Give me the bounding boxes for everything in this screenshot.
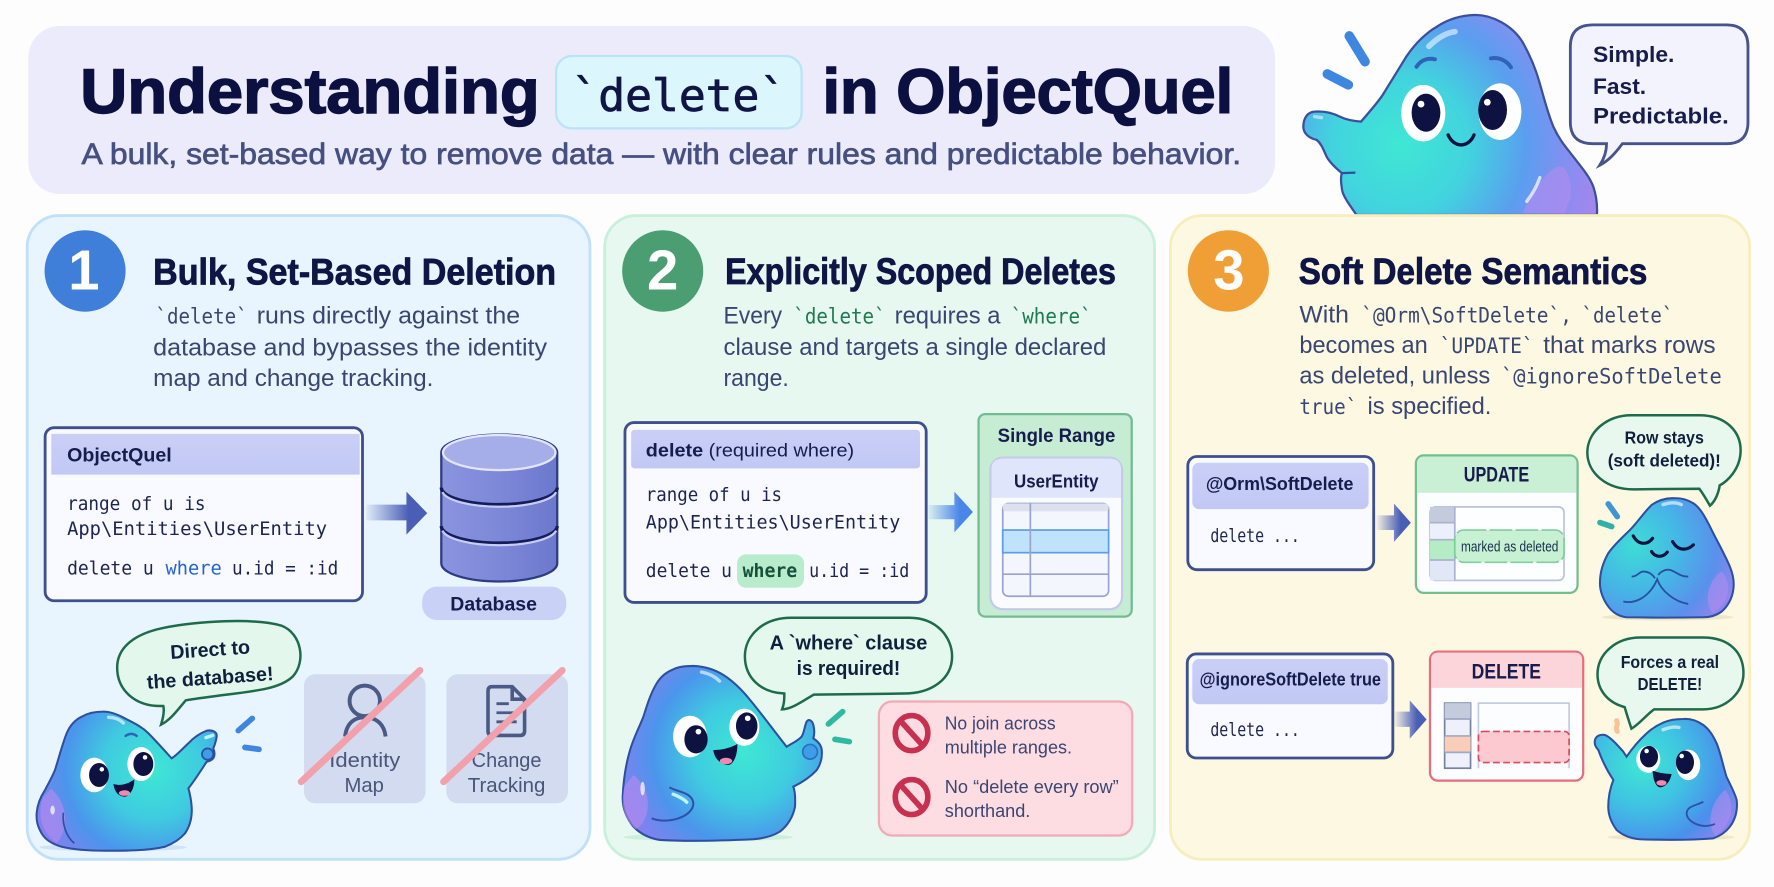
code card: delete required where: App\Entities\UserEntity [646,512,900,533]
speech bubble: simple fast predictable: Fast. [1593,74,1646,99]
update result card [1416,455,1578,593]
speech bubble: forces a real delete: Forces a real [1621,652,1719,672]
speech bubble: row stays [1587,415,1741,506]
heading 1: Bulk, Set-Based Deletion [153,250,556,293]
crossed out: identity map: Identity [329,750,401,772]
code card: Orm SoftDelete: delete ... [1210,526,1300,547]
icon: orange tick [1616,721,1617,731]
panel 3 contents [1187,230,1722,781]
body text 3 [1299,302,1722,420]
delete result card: DELETE [1472,660,1541,683]
title: `delete` [571,70,786,122]
number badge 3: 3 [1213,239,1245,302]
database label: Database [450,593,537,615]
panel 2: explicitly scoped deletes [605,216,1155,859]
header banner [28,26,1275,194]
code card: ObjectQuel: range of u is [67,494,206,515]
single range table card [979,414,1132,617]
code card: ObjectQuel: delete u [67,559,154,580]
speech bubble: where clause required [745,618,952,709]
code card: ObjectQuel: where [166,559,222,580]
body text 1: map and change tracking. [153,366,433,392]
number badge 3 [1188,230,1269,312]
title: in ObjectQuel [823,57,1233,127]
body text 3: is specified. [1367,394,1491,420]
body text 2: range. [723,366,789,392]
body text 2: `delete` [793,305,886,329]
mascot: pointing at database [37,712,217,851]
number badge 1 [45,230,126,312]
code card: delete required where: delete u [646,561,732,582]
body text 3: `@ignoreSoftDelete [1501,364,1722,389]
icon: motion ticks [238,718,259,749]
code card: Orm SoftDelete: @Orm\SoftDelete [1206,473,1353,494]
subtitle: A bulk, set-based way to remove data — with clear rules and predictable behavior. [81,138,1241,171]
code card: Orm SoftDelete [1188,457,1374,570]
icon: prohibited [895,716,928,751]
body text 2: Every [723,304,782,330]
speech bubble: forces a real delete [1598,638,1743,729]
speech bubble: where clause required: A `where` clause [770,632,927,654]
speech bubble: direct to the database [117,621,300,725]
heading 2: Explicitly Scoped Deletes [725,250,1116,292]
body text 2: clause and targets a single declared [723,335,1106,361]
speech bubble: forces a real delete: DELETE! [1638,674,1702,694]
body text 1: runs directly against the [257,304,520,330]
title: Understanding [80,57,540,127]
icon: motion ticks main mascot [1327,36,1365,85]
body text 3: that marks rows [1543,333,1716,359]
icon: motion ticks [828,712,849,742]
speech bubble: simple fast predictable: Predictable. [1593,103,1729,128]
speech bubble: simple fast predictable [1570,25,1748,165]
number badge 2: 2 [647,239,678,302]
code card: ignoreSoftDelete: @ignoreSoftDelete true [1200,670,1381,690]
number badge 1: 1 [68,238,100,302]
body text 3: true` [1299,395,1357,419]
code card: delete required where: where [743,561,797,582]
panel 1 contents [45,230,568,803]
body text 2 [723,304,1106,392]
body text 1: database and bypasses the identity [153,335,547,361]
speech bubble: simple fast predictable: Simple. [1593,42,1674,67]
arrow to database [366,492,427,535]
code card: delete required where: delete (required where) [646,439,854,461]
code card: ignoreSoftDelete: delete ... [1210,720,1300,741]
panel 3: soft delete semantics [1170,216,1750,859]
speech bubble: where clause required: is required! [797,658,900,680]
icon: motion ticks [1600,504,1617,527]
code card: ObjectQuel [45,428,363,601]
mascot: waving [1595,719,1737,841]
body text 3: `UPDATE` [1440,334,1534,358]
speech bubble: row stays: Row stays [1625,427,1704,447]
body text 2: `where` [1011,305,1092,329]
crossed out: change tracking: Tracking [468,775,545,797]
number badge 2 [622,230,703,312]
arrow to update [1376,503,1411,542]
update result card: UPDATE [1464,463,1529,486]
speech bubble: row stays: (soft deleted)! [1608,451,1721,471]
body text 1: `delete` [155,305,248,329]
code card: ObjectQuel: ObjectQuel [67,445,172,467]
rules callout: No “delete every row” [945,776,1119,797]
code card: delete required where [625,423,926,602]
database label [422,587,566,620]
rules callout [879,701,1132,836]
crossed out: identity map: Map [345,775,384,797]
arrow to single range [928,492,973,532]
delete result card [1430,652,1583,781]
single range table card: UserEntity [1014,471,1099,492]
arrow to delete [1395,700,1427,739]
code card: delete required where: range of u is [646,485,782,506]
title [80,56,1233,128]
rules callout: shorthand. [945,800,1030,821]
body text 1 [153,304,547,392]
crossed out: identity map [301,670,426,803]
rules callout: multiple ranges. [945,736,1072,758]
crossed out: change tracking [444,670,568,803]
single range table card: Single Range [998,426,1115,447]
speech bubble: direct to the database: Direct to [170,636,251,664]
crossed out: change tracking: Change [472,750,541,772]
panel 1: bulk set-based deletion [27,216,590,859]
rules callout: No join across [945,713,1056,734]
body text 3: `delete` [1581,303,1673,327]
body text 3: as deleted, unless [1299,363,1490,390]
heading 3: Soft Delete Semantics [1299,250,1647,292]
body text 3: becomes an [1299,333,1428,359]
code card: ignoreSoftDelete [1187,654,1393,758]
code card: delete required where: u.id = :id [809,561,909,582]
body text 2: requires a [895,304,1001,330]
mascot: finger raised [623,666,822,841]
panel 2 contents [622,230,1132,836]
icon: database [441,434,557,582]
mascot: main, waving top right [1303,15,1597,215]
code card: ObjectQuel: App\Entities\UserEntity [67,519,327,540]
body text 3: With [1299,302,1349,328]
mascot: content eyes closed [1600,498,1734,621]
code card: ObjectQuel: u.id = :id [232,559,338,580]
icon: prohibited second [895,780,928,815]
update result card: marked as deleted [1461,540,1558,556]
body text 3: `@Orm\SoftDelete`, [1361,303,1572,327]
speech bubble: direct to the database: the database! [146,663,274,694]
